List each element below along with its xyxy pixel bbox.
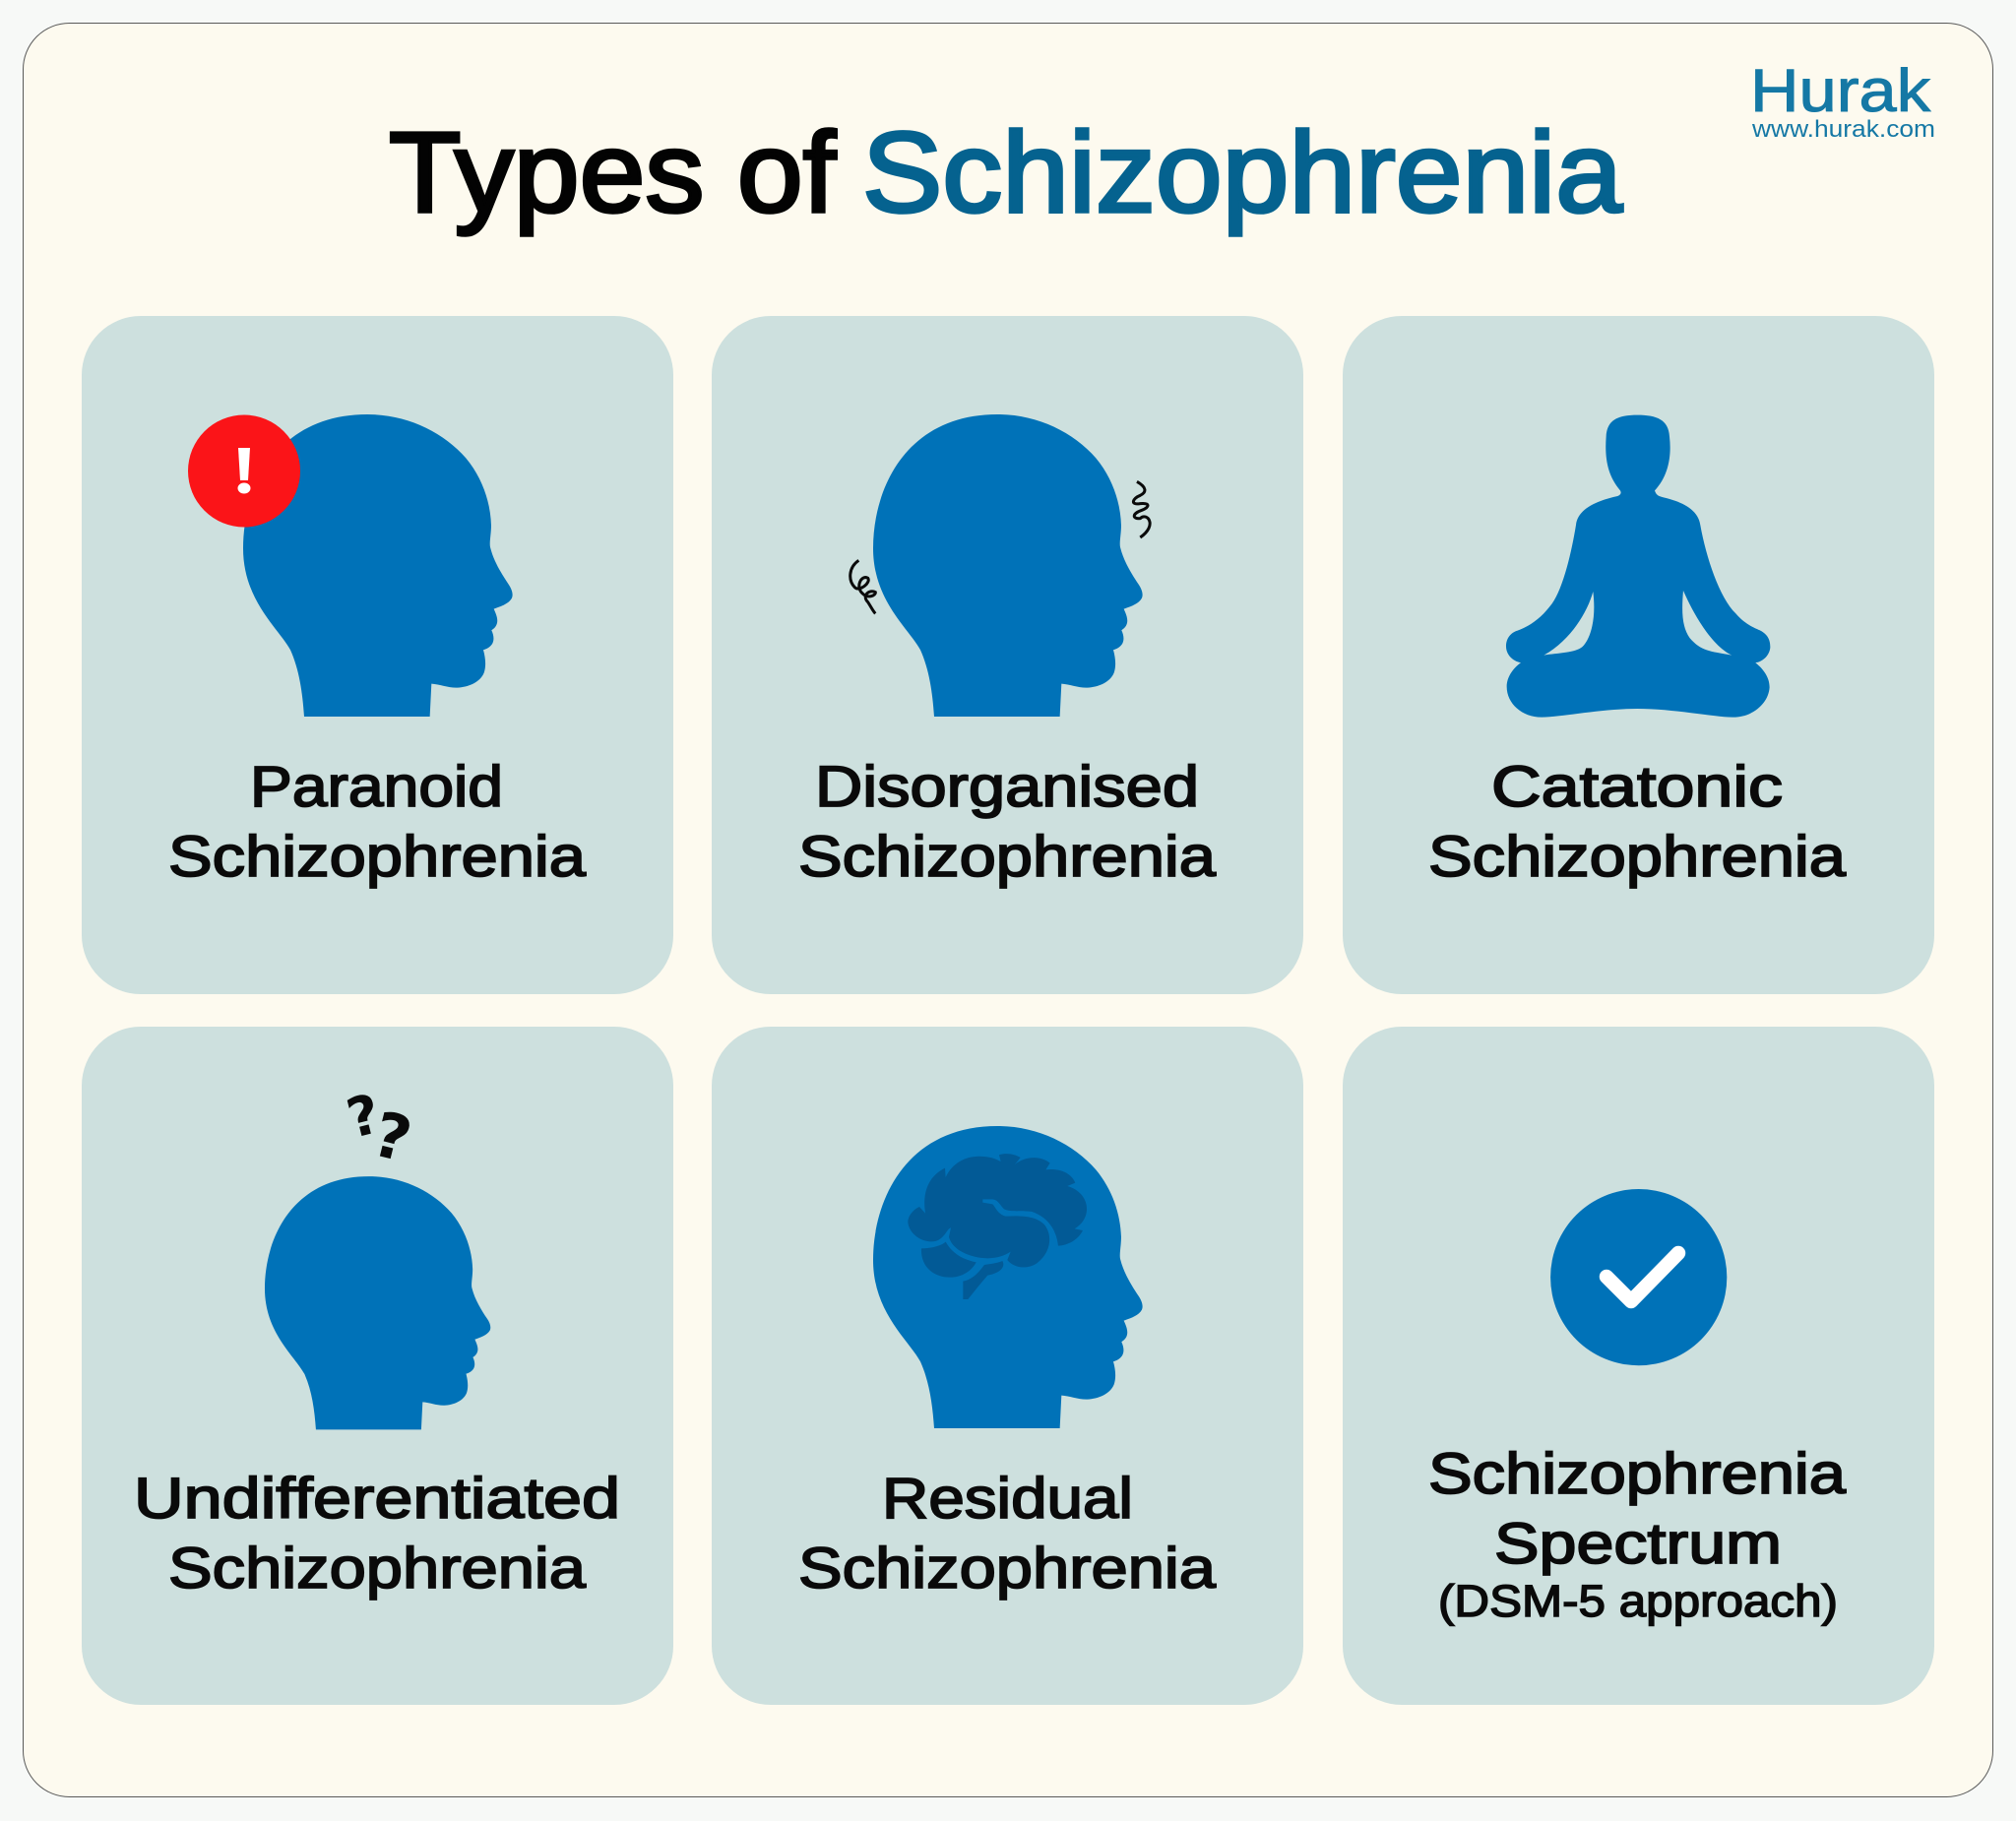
panel: undifferentiated [82,1027,673,1705]
panel: catatonic [1343,316,1934,994]
title [389,108,1623,236]
panel: paranoid [82,316,673,994]
icon: check circle [1550,1189,1727,1365]
label: Residual [882,1467,1133,1531]
label: Schizophrenia [1428,1442,1847,1506]
label [1428,755,1847,889]
icon: head with question marks: ? [341,1082,386,1151]
title: Types of [389,108,837,236]
icon: head with question marks [265,1082,490,1429]
label [1428,1442,1847,1626]
label [798,1467,1217,1601]
label: Schizophrenia [798,825,1217,889]
icon: head with squiggles [850,414,1150,717]
label: Paranoid [250,755,503,819]
label: (DSM-5 approach) [1438,1576,1838,1626]
icon: head with question marks: ? [366,1099,418,1176]
label: Catatonic [1491,755,1783,819]
panel: disorganised [712,316,1303,994]
icon: head with brain [873,1126,1143,1428]
logo: Hurak [1750,57,1935,143]
label [134,1467,620,1601]
label: Schizophrenia [168,1537,587,1601]
label: Spectrum [1494,1512,1782,1576]
logo: Hurak: Hurak [1750,57,1931,124]
label [168,755,587,889]
icon: meditating figure [1506,415,1770,718]
panel: residual [712,1027,1303,1705]
label: Schizophrenia [798,1537,1217,1601]
label [798,755,1217,889]
title: Schizophrenia [862,108,1623,236]
label: Schizophrenia [1428,825,1847,889]
logo: Hurak: www.hurak.com [1751,116,1935,143]
label: Schizophrenia [168,825,587,889]
label: Undifferentiated [134,1467,620,1531]
panel: spectrum [1343,1027,1934,1705]
icon: head with alert [188,414,513,717]
label: Disorganised [815,755,1199,819]
